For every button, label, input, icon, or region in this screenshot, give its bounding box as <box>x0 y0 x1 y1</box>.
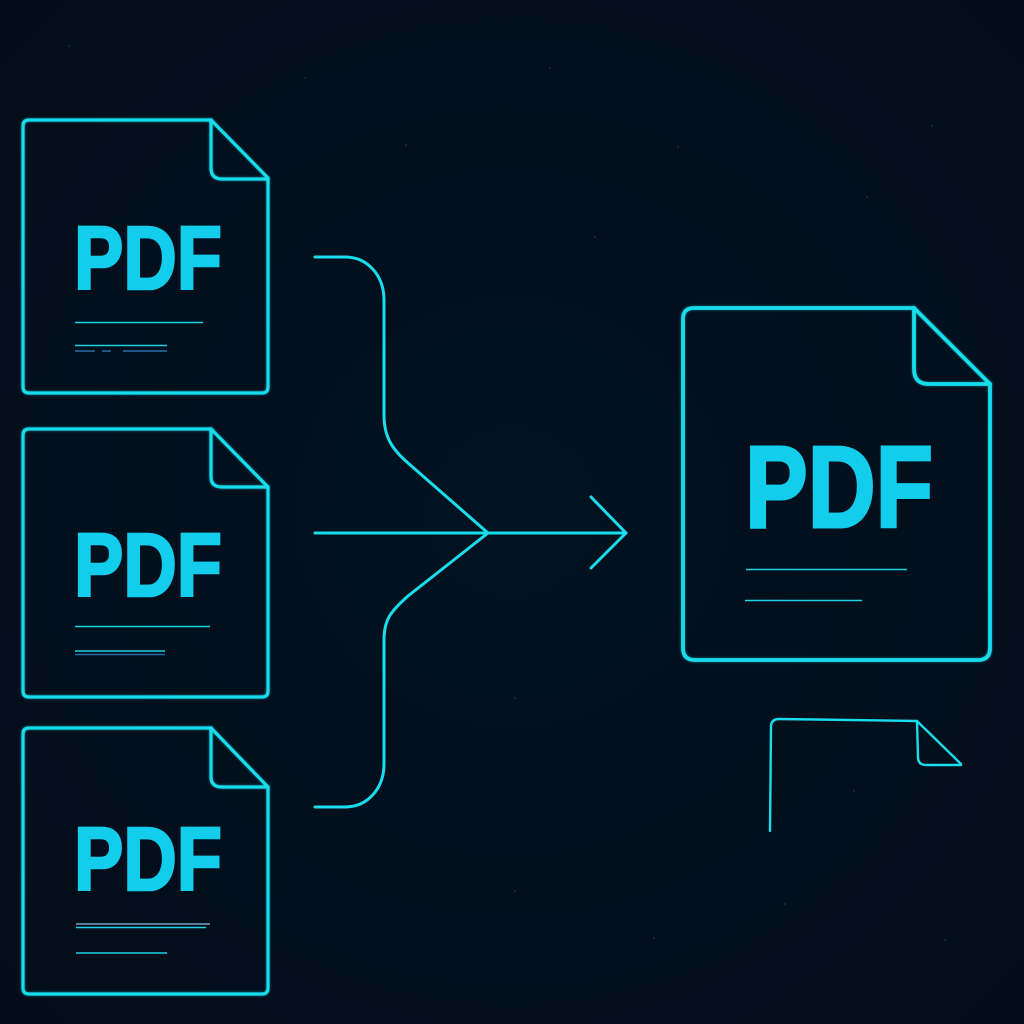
document 2 PDF label: PDF <box>74 516 222 616</box>
document 3 text lines <box>76 924 210 953</box>
document 1 PDF label: PDF <box>74 209 222 309</box>
document 2 page fold <box>211 429 268 487</box>
document 3 outline <box>23 728 268 994</box>
middle line <box>315 532 488 534</box>
document 2 outline <box>23 429 268 697</box>
document 1 text lines <box>75 322 203 351</box>
partial document outline <box>770 719 961 831</box>
merged document PDF label: PDF <box>745 422 933 552</box>
merged document text lines <box>745 570 907 600</box>
document 3 page fold <box>211 728 268 787</box>
merged document outline <box>683 308 990 660</box>
source document 3 <box>23 728 268 994</box>
partial page edge <box>770 719 961 831</box>
merged document page fold <box>914 308 990 384</box>
source document 1 <box>23 120 268 393</box>
merged PDF document <box>683 308 990 660</box>
document 2 text lines <box>75 626 210 654</box>
top branch <box>315 257 488 533</box>
arrow to merged document <box>488 497 626 568</box>
source document 2 <box>23 429 268 697</box>
document 1 outline <box>23 120 268 393</box>
bottom branch <box>315 533 488 807</box>
partial page fold <box>917 721 961 765</box>
document 1 page fold <box>211 120 268 179</box>
document 3 PDF label: PDF <box>74 810 222 910</box>
merge connector <box>315 257 488 807</box>
